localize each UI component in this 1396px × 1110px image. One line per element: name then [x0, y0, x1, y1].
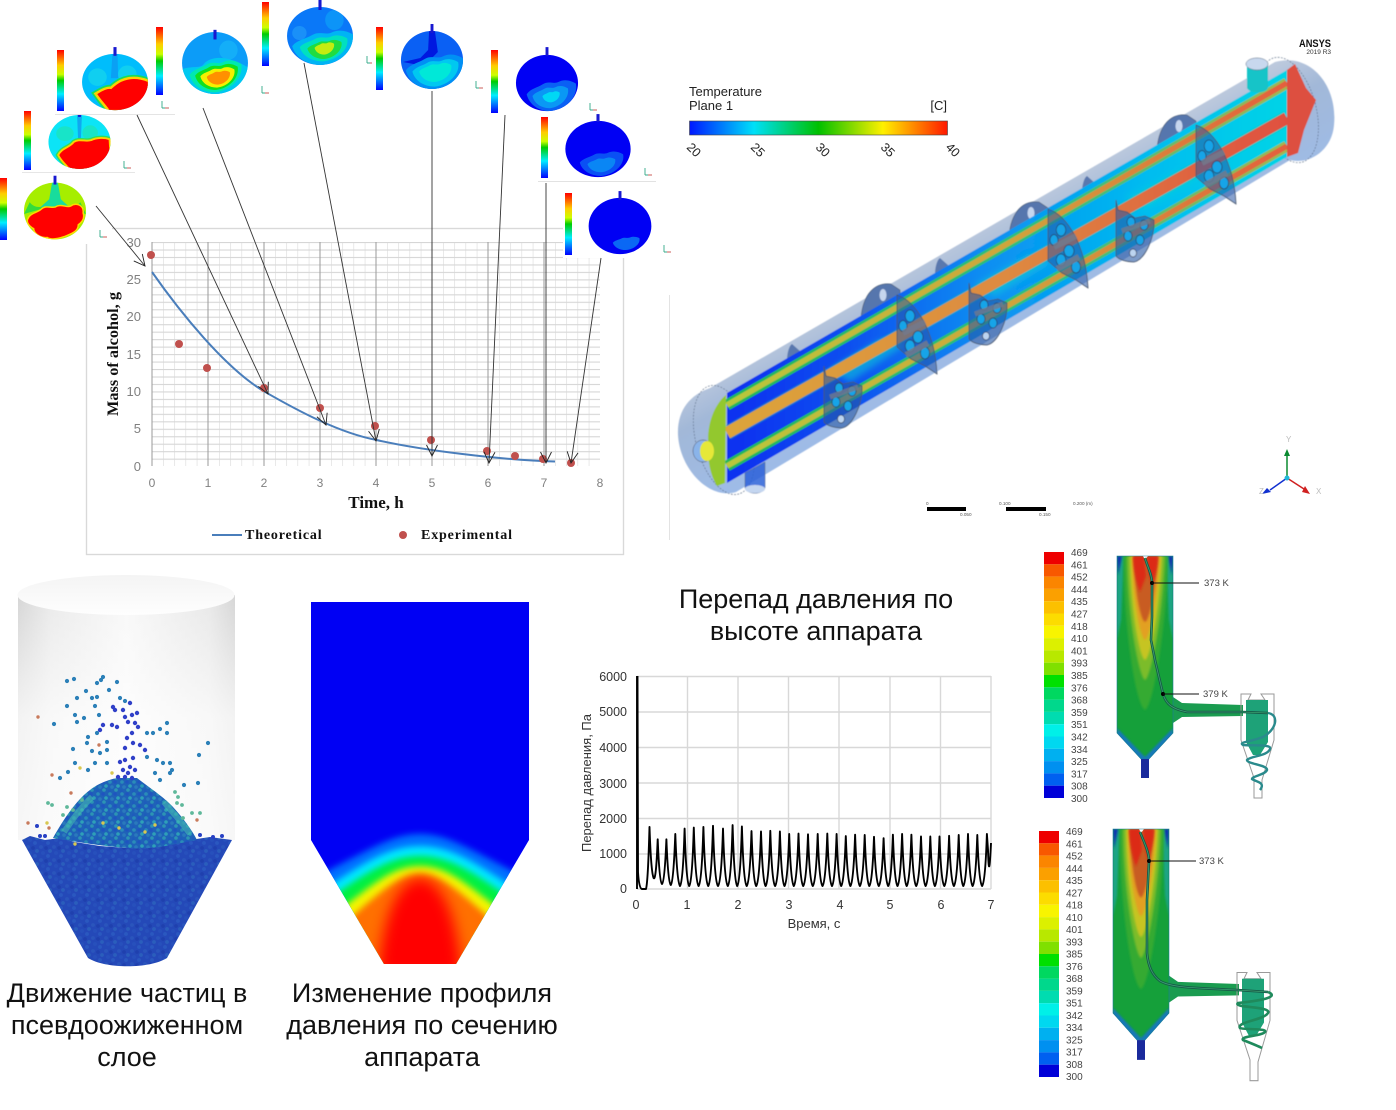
- legend: Theoretical: [245, 528, 323, 543]
- hot inlet port: [693, 440, 714, 462]
- scale labels: 351: [1071, 720, 1088, 731]
- temperature callout: [1147, 856, 1224, 867]
- scale labels: 410: [1066, 913, 1083, 924]
- inlet face: [708, 395, 726, 486]
- flow patches on plane: [830, 170, 1200, 382]
- panel: pressure profile over cross-section: [311, 602, 529, 964]
- y axis labels: [127, 235, 141, 474]
- thumbnail 5: cross-section: [262, 0, 372, 66]
- arrows from cross-sections to curve: [96, 63, 601, 463]
- scale labels: 308: [1071, 782, 1088, 793]
- scale labels: 418: [1071, 622, 1088, 633]
- x axis labels: 0: [149, 476, 156, 490]
- temperature legend: Temperature: [689, 84, 762, 99]
- scale labels: 418: [1066, 900, 1083, 912]
- y tick labels: 0: [620, 882, 627, 896]
- temperature legend: [C]: [930, 98, 947, 113]
- y axis labels: 0: [134, 459, 141, 474]
- scale labels: 393: [1071, 659, 1088, 670]
- silo cylinder: [18, 595, 235, 840]
- pressure trace: [637, 676, 991, 889]
- scale labels: 325: [1066, 1035, 1083, 1046]
- caption: particle motion: псевдоожиженном: [11, 1010, 243, 1040]
- scale labels: 435: [1066, 876, 1083, 887]
- y axis labels: 20: [127, 309, 141, 324]
- panel: particle motion in fluidized bed: [18, 575, 235, 966]
- divider: [668, 295, 670, 540]
- cone with settled particles: [22, 836, 232, 966]
- scale labels: 359: [1071, 708, 1088, 719]
- legend: Experimental: [421, 528, 513, 543]
- x axis labels: 1: [205, 476, 212, 490]
- particle trajectory: [1145, 558, 1275, 790]
- thumbnail 2: cross-section: [20, 110, 135, 172]
- shell: [678, 60, 1334, 493]
- scale labels: 334: [1071, 745, 1088, 756]
- scale labels: 317: [1066, 1048, 1083, 1058]
- panel: heat exchanger temperature field: [678, 51, 1334, 501]
- scale labels: [1066, 827, 1083, 1083]
- x tick labels: 6: [938, 898, 945, 912]
- scale labels: 342: [1071, 732, 1088, 744]
- y axis labels: 5: [134, 421, 141, 436]
- x tick labels: [633, 898, 995, 912]
- scale labels: 410: [1071, 634, 1088, 645]
- heading: pressure drop: Перепад давления по: [679, 584, 953, 614]
- front baffles: [824, 125, 1236, 428]
- thumbnail 3: cross-section: [55, 46, 175, 114]
- scale bar: [926, 501, 1093, 517]
- heading: pressure drop: высоте аппарата: [710, 616, 923, 646]
- y axis labels: 30: [127, 235, 141, 250]
- scale bar: 0.200 (m): [1073, 501, 1093, 506]
- scale labels: 325: [1071, 757, 1088, 768]
- x axis labels: 7: [541, 476, 548, 490]
- temperature callouts: 373 K: [1204, 578, 1229, 589]
- x axis labels: 5: [429, 476, 436, 490]
- caption: particle motion: слое: [97, 1042, 157, 1072]
- scale labels: 401: [1071, 646, 1088, 657]
- chart: pressure drop vs time: Время, с: [788, 916, 841, 931]
- scale bar: 0.100: [999, 501, 1011, 506]
- scale labels: 317: [1071, 769, 1088, 780]
- x axis title: Time, h: [348, 493, 404, 512]
- caption: particle motion: Движение частиц в: [7, 978, 247, 1008]
- caption: pressure profile: давления по сечению: [286, 1010, 558, 1040]
- scale labels: 300: [1071, 794, 1088, 805]
- scale labels: 461: [1071, 560, 1088, 571]
- furnace and cyclone: [1113, 829, 1270, 1081]
- thumbnail 9: cross-section: [563, 188, 671, 258]
- scale labels: 359: [1066, 986, 1083, 997]
- x tick labels: 5: [887, 898, 894, 912]
- cold-side nozzles: [745, 58, 1268, 493]
- x axis labels: 2: [261, 476, 268, 490]
- temperature legend: 35: [878, 140, 898, 160]
- x axis labels: [149, 476, 604, 490]
- scale bar: 0: [926, 501, 929, 506]
- y axis labels: 15: [127, 347, 141, 362]
- scale labels: 368: [1066, 974, 1083, 985]
- x axis labels: 3: [317, 476, 324, 490]
- scale labels: 427: [1066, 888, 1083, 899]
- ANSYS logo text: ANSYS: [1299, 38, 1331, 50]
- back baffles: [787, 115, 1196, 361]
- scale labels: 385: [1071, 671, 1088, 682]
- scale labels: 427: [1071, 610, 1088, 620]
- experimental points: [147, 251, 575, 467]
- outlet face: [1287, 64, 1316, 157]
- caption: pressure profile: Изменение профиля: [292, 978, 552, 1008]
- y tick labels: 2000: [599, 812, 627, 826]
- panel: furnace and cyclone temperature field, case 2: [1039, 827, 1272, 1083]
- section plane: [727, 70, 1287, 483]
- x tick labels: 3: [786, 898, 793, 912]
- ANSYS logo text: 2019 R3: [1306, 49, 1331, 56]
- temperature scale: [1039, 831, 1059, 1077]
- scale labels: 461: [1066, 839, 1083, 850]
- chart grid: [152, 242, 600, 466]
- scale labels: 401: [1066, 925, 1083, 936]
- scale labels: 300: [1066, 1072, 1083, 1083]
- scale bar: 0.050: [960, 512, 972, 517]
- axis triad: X: [1316, 487, 1322, 496]
- scale labels: 469: [1066, 827, 1083, 838]
- scale labels: 351: [1066, 998, 1083, 1010]
- lower tube: [727, 146, 1287, 466]
- x tick labels: 1: [684, 898, 691, 912]
- particle trajectory: [1140, 832, 1272, 1048]
- scale labels: 308: [1066, 1060, 1083, 1071]
- temperature callouts: [1150, 578, 1229, 700]
- thumbnail 1: cross-section t=0: [0, 175, 112, 244]
- centre tube: [727, 118, 1287, 433]
- theoretical curve: [152, 272, 555, 462]
- temperature legend: 20: [684, 140, 704, 160]
- temperature legend: 25: [748, 140, 768, 160]
- scale labels: 334: [1066, 1023, 1083, 1034]
- scale labels: [1071, 548, 1088, 805]
- x tick labels: 7: [988, 898, 995, 912]
- fluidized mound: [53, 778, 197, 849]
- temperature callouts: 379 K: [1203, 689, 1228, 700]
- scale labels: 342: [1066, 1011, 1083, 1022]
- scale labels: 368: [1071, 696, 1088, 707]
- scale labels: 376: [1066, 962, 1083, 973]
- scale bar: 0.150: [1039, 512, 1051, 517]
- panel: mass of alcohol chart: [86, 228, 624, 554]
- y tick labels: 1000: [599, 847, 627, 861]
- scale labels: 469: [1071, 548, 1088, 559]
- panel: furnace and cyclone temperature field, case 1: [1044, 548, 1275, 805]
- thumbnail 7: cross-section: [489, 46, 601, 114]
- temperature legend: Plane 1: [689, 98, 733, 113]
- scale labels: 435: [1071, 597, 1088, 608]
- temperature callout: 373 K: [1199, 856, 1224, 867]
- chart: pressure drop vs time: [579, 670, 995, 931]
- axis triad: Y: [1286, 435, 1292, 444]
- scale labels: 393: [1066, 937, 1083, 948]
- scale labels: 376: [1071, 683, 1088, 694]
- caption: particle motion: [7, 978, 247, 1072]
- x tick labels: 0: [633, 898, 640, 912]
- scale labels: 452: [1071, 573, 1088, 584]
- thumbnail 6: cross-section: [372, 24, 487, 94]
- y tick labels: [599, 670, 627, 896]
- y axis title: Mass of alcohol, g: [103, 292, 122, 416]
- x axis labels: 6: [485, 476, 492, 490]
- temperature legend: 30: [813, 140, 833, 160]
- legend: [212, 528, 513, 543]
- axis titles: Перепад давления, Па: [579, 713, 594, 852]
- axis triad: Z: [1259, 487, 1264, 496]
- axis triad: [1259, 435, 1322, 496]
- y tick labels: 6000: [599, 670, 627, 684]
- ANSYS logo text: [1299, 38, 1331, 56]
- caption: pressure profile: аппарата: [364, 1042, 481, 1072]
- grid: [637, 676, 991, 889]
- heading: pressure drop: [679, 584, 953, 646]
- temperature legend: [684, 84, 963, 160]
- thumbnail 4: cross-section: [155, 24, 269, 98]
- temperature scale: [1044, 552, 1064, 798]
- x tick labels: 4: [837, 898, 844, 912]
- tube sheet outlines: [682, 51, 1329, 501]
- x axis labels: 8: [597, 476, 604, 490]
- temperature legend: 40: [943, 140, 963, 160]
- scale labels: 444: [1066, 864, 1083, 875]
- y tick labels: 3000: [599, 777, 627, 791]
- y axis labels: 10: [127, 384, 141, 399]
- scale labels: 452: [1066, 852, 1083, 862]
- caption: pressure profile: [286, 978, 558, 1072]
- scale labels: 444: [1071, 585, 1088, 596]
- y tick labels: 5000: [599, 705, 627, 719]
- suspended particles: [28, 677, 222, 844]
- thumbnail 8: cross-section: [538, 114, 656, 182]
- x axis labels: 4: [373, 476, 380, 490]
- y axis labels: 25: [127, 272, 141, 287]
- y tick labels: 4000: [599, 741, 627, 755]
- furnace and cyclone: [1117, 556, 1274, 798]
- scale labels: 385: [1066, 950, 1083, 960]
- upper tube: [727, 83, 1287, 405]
- x tick labels: 2: [735, 898, 742, 912]
